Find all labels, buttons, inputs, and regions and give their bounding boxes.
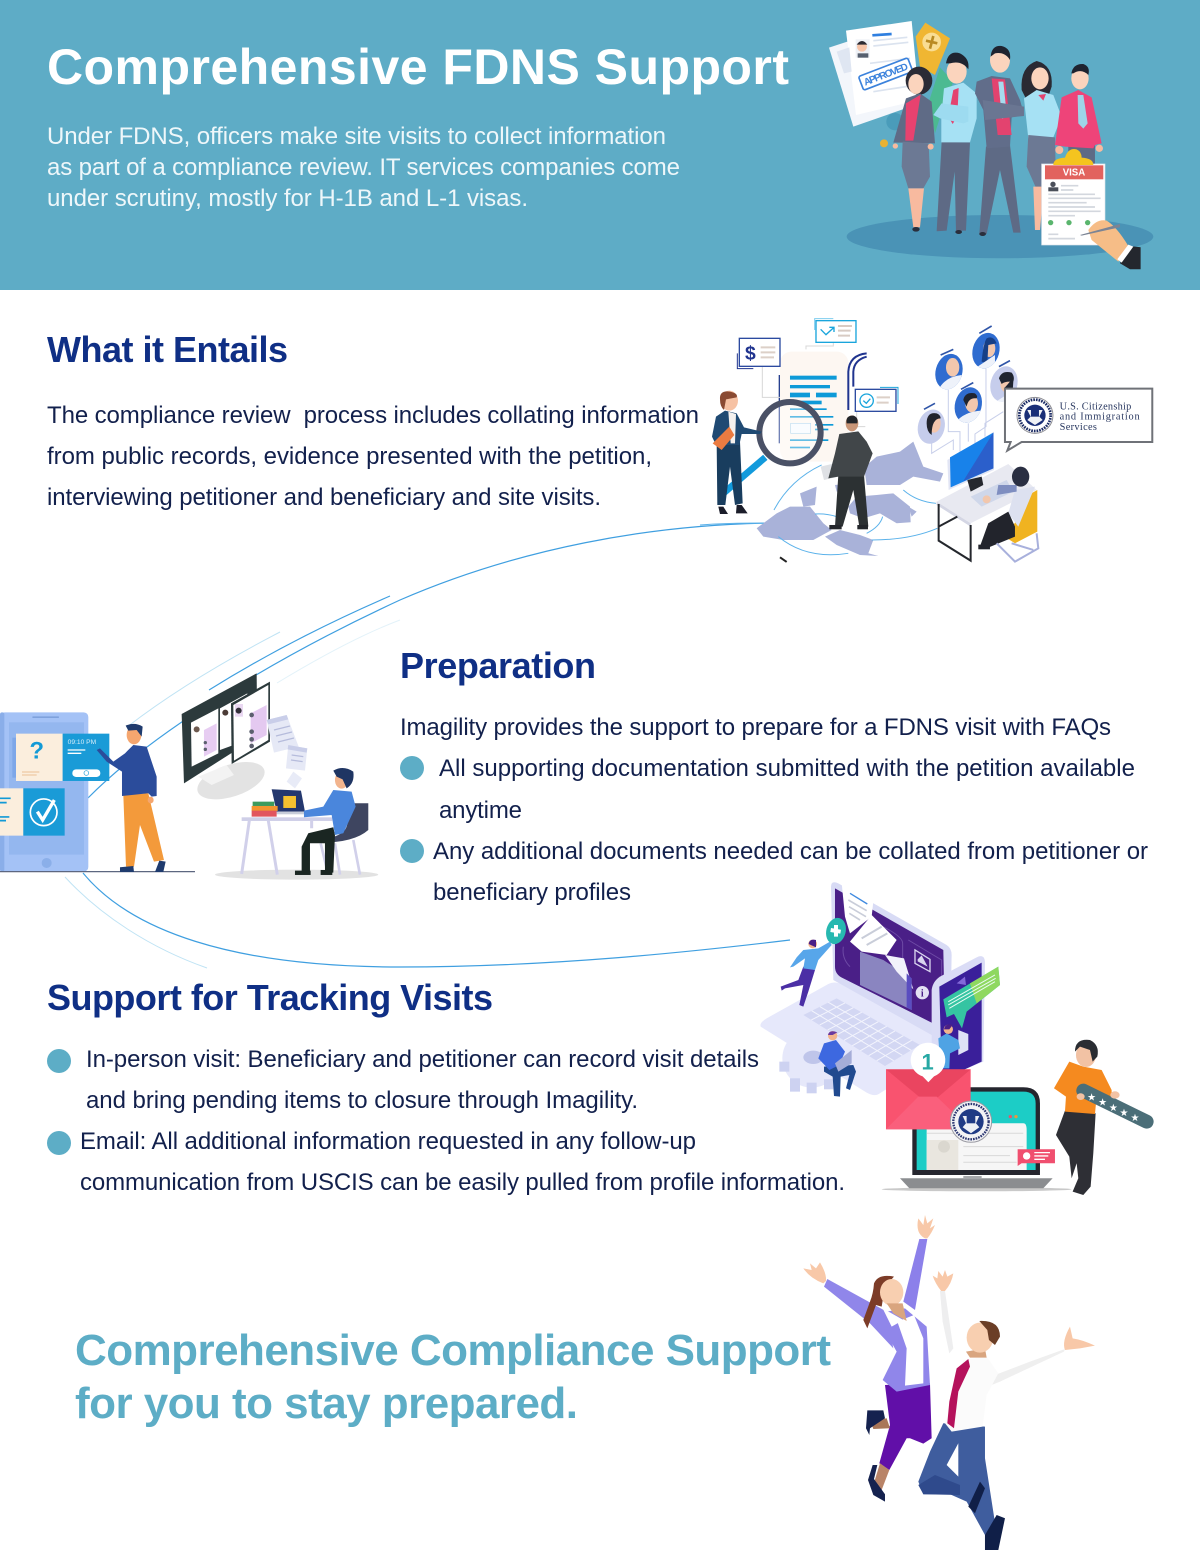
illustration: celebrating couple (803, 1215, 1095, 1550)
icon: small laptop (882, 1087, 1072, 1191)
panel: preparation (0, 645, 1148, 906)
world map (757, 442, 943, 556)
icon: visa clipboard (1042, 149, 1141, 269)
icon: envelope (886, 1043, 971, 1129)
document (780, 352, 848, 462)
person: man with star rating: ★ (1119, 1108, 1128, 1119)
callout: USCIS: Services (1060, 422, 1097, 433)
person: man in suit (821, 415, 873, 529)
bullet: supporting documentation: anytime (439, 797, 522, 824)
closing headline: Comprehensive Compliance Support (75, 1326, 831, 1375)
panel: support for tracking visits (47, 882, 1147, 1196)
intro text: under scrutiny, mostly for H-1B and L-1 visas. (47, 185, 528, 212)
heading: What it Entails (47, 329, 288, 370)
illustration: visa team: APPROVED (862, 62, 910, 89)
icon: dollar card (737, 338, 780, 369)
title: Comprehensive FDNS Support (47, 39, 789, 95)
heading: Support for Tracking Visits (47, 977, 493, 1018)
person: seated with laptop (818, 1031, 856, 1097)
icon: magnifier (723, 402, 821, 493)
icon: dollar card: $ (745, 343, 756, 364)
icon: envelope: 1 (922, 1049, 934, 1074)
bullet: supporting documentation (400, 755, 1135, 824)
icon: isometric laptop: i (921, 989, 924, 1000)
person: man pointing (97, 724, 166, 872)
body text: from public records, evidence presented with the petition, (47, 443, 652, 470)
person: man with star rating: ★ (1098, 1098, 1107, 1109)
person: woman with folder (712, 391, 762, 514)
icon: gear (779, 1029, 841, 1093)
person: reaching figure (781, 940, 832, 1007)
icon: monitors (182, 673, 270, 807)
illustration: tracking devices (760, 882, 1147, 1195)
illustration: visa team (829, 21, 1153, 269)
icon: floating papers (267, 715, 307, 788)
bullet: in-person visit (47, 1046, 759, 1114)
bullet: additional documents (400, 838, 1148, 906)
person: man jumping (918, 1270, 1095, 1550)
ground line (0, 870, 195, 874)
person: man at desk (295, 768, 368, 875)
connector curves (65, 523, 790, 968)
intro text: as part of a compliance review. IT services companies come (47, 154, 680, 181)
callout: USCIS: and Immigration (1060, 412, 1140, 423)
icon: phone with cards (0, 712, 109, 872)
person: woman right (1021, 61, 1062, 230)
icon: desk and laptop (215, 789, 378, 880)
icon: phone and speech bubble (932, 956, 1000, 1070)
person: man right (1055, 64, 1103, 167)
avatars (913, 326, 1023, 453)
illustration: desk with monitor (937, 432, 1038, 562)
icon: isometric laptop (760, 882, 952, 1095)
person: man centre (975, 46, 1024, 236)
bullet: email (47, 1128, 845, 1196)
body text (47, 402, 699, 511)
closing headline: for you to stay prepared. (75, 1379, 578, 1428)
icon: visa clipboard: VISA (1063, 168, 1085, 179)
bullet: additional documents: Any additional documents needed can be collated from petitioner or (433, 838, 1148, 865)
body text: The compliance review process includes collating information (47, 402, 699, 429)
body text: interviewing petitioner and beneficiary and site visits. (47, 484, 601, 511)
person: man with star rating: ★ (1087, 1092, 1096, 1103)
icon: phone with cards: 09:10 PM (68, 739, 96, 746)
closing headline (75, 1326, 831, 1428)
icon: bell notification (1018, 1149, 1055, 1166)
icon: DHS seal (950, 1101, 992, 1142)
panel: header (0, 0, 1200, 290)
bullet: email: communication from USCIS can be easily pulled from profile information. (80, 1169, 845, 1196)
panel: closing message (75, 1215, 1095, 1550)
person: figure by phone (938, 1024, 960, 1068)
icon: clock card (855, 387, 898, 411)
icon: trend card (815, 319, 856, 342)
icon: USCIS seal (1017, 397, 1053, 433)
bullet: in-person visit: In-person visit: Beneficiary and petitioner can record visit details (86, 1046, 759, 1073)
illustration: compliance review network (700, 319, 1152, 562)
intro text: Under FDNS, officers make site visits to collect information (47, 123, 666, 150)
person: man with star rating: ★ (1109, 1103, 1118, 1114)
header band (0, 0, 1200, 290)
intro text (47, 123, 680, 212)
illustration: preparing documents (0, 673, 378, 880)
callout: USCIS (1005, 389, 1152, 451)
person: woman jumping (803, 1215, 935, 1502)
person: man with star rating: ★ (1130, 1113, 1139, 1124)
person: woman left (893, 67, 935, 232)
body text: Imagility provides the support to prepare for a FDNS visit with FAQs (400, 714, 1111, 741)
bullet: supporting documentation: All supporting documentation submitted with the petition available (439, 755, 1135, 782)
callout: USCIS: U.S. Citizenship (1060, 401, 1131, 412)
person: man second (933, 53, 977, 234)
person: man with star rating (1054, 1040, 1147, 1195)
panel: what it entails (47, 319, 1152, 562)
heading: Preparation (400, 645, 596, 686)
bullet: email: Email: All additional information requested in any follow-up (80, 1128, 696, 1155)
bullet: in-person visit: and bring pending items to closure through Imagility. (86, 1087, 638, 1114)
icon: teal plus bubble (823, 916, 849, 946)
icon: phone with cards: ? (29, 738, 44, 765)
bullet: additional documents: beneficiary profiles (433, 879, 631, 906)
